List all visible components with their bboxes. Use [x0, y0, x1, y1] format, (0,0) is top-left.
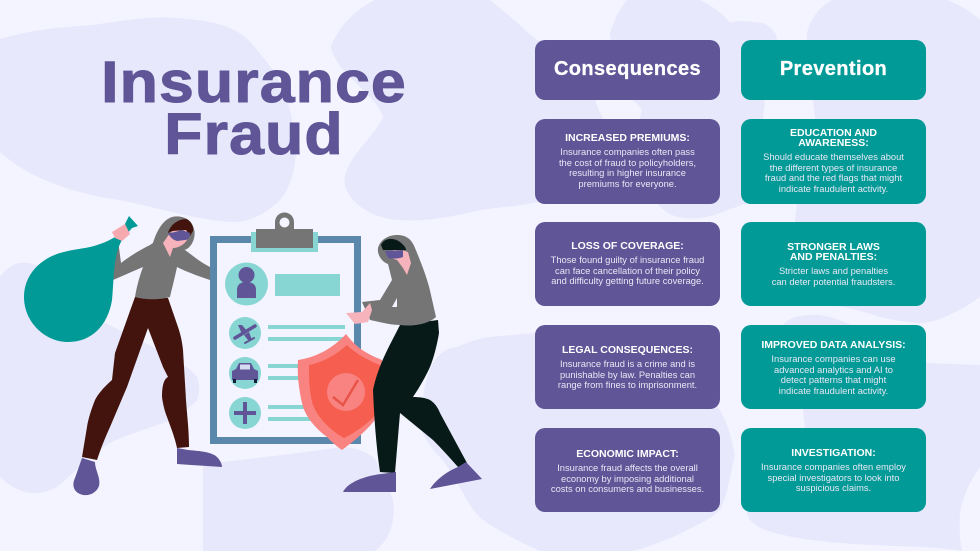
- card: increased premiums: INCREASED PREMIUMS:: [565, 132, 690, 144]
- icon: clipboard: [214, 212, 358, 440]
- card: legal consequences: punishable by law. Penalties can: [560, 370, 695, 380]
- card: investigation: suspicious claims.: [796, 483, 871, 493]
- title: Insurance: [101, 50, 407, 115]
- card: legal consequences: range from fines to imprisonment.: [558, 380, 697, 390]
- card: increased premiums: Insurance companies often pass: [560, 147, 695, 157]
- card: improved data analysis: [741, 325, 926, 409]
- card: improved data analysis: indicate fraudulent activity.: [779, 386, 888, 396]
- card: investigation: special investigators to look into: [768, 473, 899, 483]
- card: education and awareness: EDUCATION AND: [790, 127, 877, 139]
- title: Fraud: [164, 102, 344, 167]
- card: increased premiums: [535, 119, 720, 204]
- card: investigation: INVESTIGATION:: [791, 447, 876, 459]
- header: prevention: Prevention: [780, 58, 887, 80]
- card: loss of coverage: [535, 222, 720, 306]
- header: consequences: Consequences: [554, 58, 701, 80]
- card: education and awareness: fraud and the red flags that might: [765, 173, 902, 183]
- card: investigation: Insurance companies often employ: [761, 462, 906, 472]
- title: [101, 50, 407, 167]
- card: legal consequences: Insurance fraud is a crime and is: [560, 359, 695, 369]
- card: economic impact: Insurance fraud affects the overall: [557, 463, 698, 473]
- card: loss of coverage: can face cancellation of their policy: [555, 266, 700, 276]
- card: education and awareness: the different types of insurance: [770, 163, 897, 173]
- card: economic impact: [535, 428, 720, 512]
- card: economic impact: ECONOMIC IMPACT:: [576, 448, 679, 460]
- card: improved data analysis: IMPROVED DATA ANALYSIS:: [761, 339, 906, 351]
- card: education and awareness: Should educate themselves about: [763, 152, 904, 162]
- card: improved data analysis: Insurance companies can use: [771, 354, 896, 364]
- card: loss of coverage: and difficulty getting future coverage.: [551, 276, 704, 286]
- card: education and awareness: indicate fraudulent activity.: [779, 184, 888, 194]
- card: increased premiums: resulting in higher insurance: [569, 168, 686, 178]
- card: stronger laws and penalties: can deter potential fraudsters.: [772, 277, 895, 287]
- card: loss of coverage: LOSS OF COVERAGE:: [571, 240, 684, 252]
- card: loss of coverage: Those found guilty of insurance fraud: [551, 255, 704, 265]
- card: improved data analysis: advanced analytics and AI to: [774, 365, 893, 375]
- figure: fraudster with bag: [73, 216, 222, 495]
- card: increased premiums: premiums for everyone.: [578, 179, 677, 189]
- card: economic impact: economy by imposing additional: [561, 474, 694, 484]
- card: stronger laws and penalties: STRONGER LAWS: [787, 241, 880, 253]
- card: stronger laws and penalties: AND PENALTIES:: [790, 251, 877, 263]
- card: legal consequences: [535, 325, 720, 409]
- figure: fraudster with shield: [343, 235, 482, 492]
- card: investigation: [741, 428, 926, 512]
- card: stronger laws and penalties: Stricter laws and penalties: [779, 266, 888, 276]
- card: economic impact: costs on consumers and businesses.: [551, 484, 704, 494]
- icon: money bag: [24, 216, 138, 342]
- card: education and awareness: AWARENESS:: [798, 137, 869, 149]
- card: improved data analysis: detect patterns that might: [781, 375, 886, 385]
- card: increased premiums: the cost of fraud to policyholders,: [559, 158, 696, 168]
- card: stronger laws and penalties: [741, 222, 926, 306]
- header: prevention: [741, 40, 926, 100]
- card: education and awareness: [741, 119, 926, 204]
- header: consequences: [535, 40, 720, 100]
- icon: red shield: [298, 334, 384, 450]
- card: legal consequences: LEGAL CONSEQUENCES:: [562, 344, 693, 356]
